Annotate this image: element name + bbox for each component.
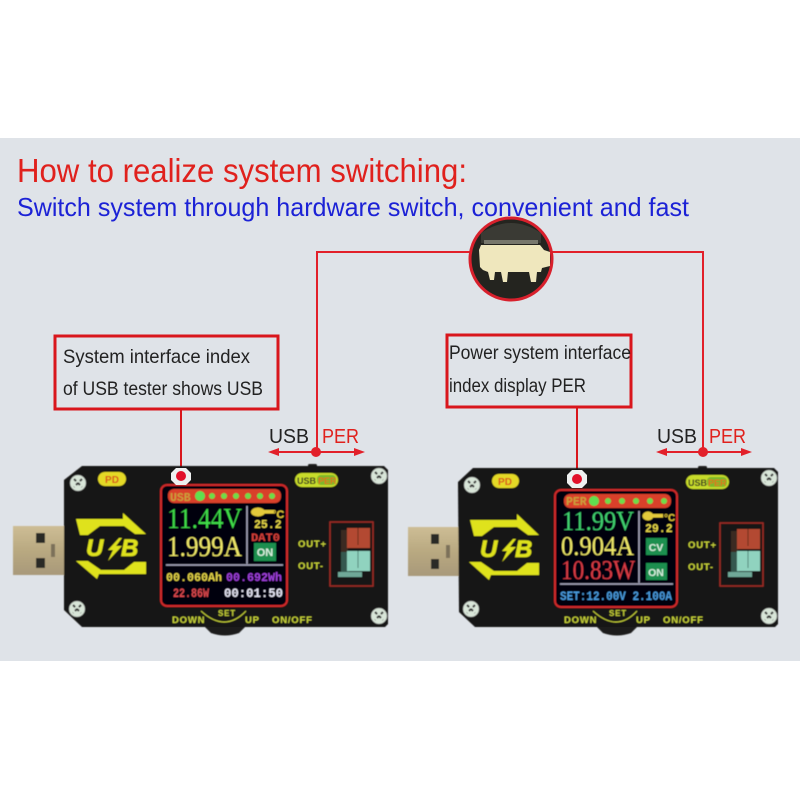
slide switch nub xyxy=(308,464,317,467)
left USB / PER switch indicator xyxy=(268,426,365,457)
USB PER badge xyxy=(295,473,338,487)
PD badge xyxy=(98,472,126,486)
PD badge: PD xyxy=(498,477,512,488)
USB logo xyxy=(76,513,146,579)
callout: power system index xyxy=(447,335,631,407)
screen: PER xyxy=(566,496,587,509)
board xyxy=(64,466,388,627)
button labels xyxy=(564,609,704,626)
screen: ON xyxy=(648,567,664,579)
PD badge xyxy=(492,474,519,488)
USB logo: U xyxy=(86,535,104,562)
marker: left index dot xyxy=(171,468,191,485)
USB PER badge: PER xyxy=(708,478,727,488)
output terminal: OUT+ xyxy=(688,540,717,551)
callout: USB tester index: of USB tester shows USB xyxy=(63,379,263,400)
screen: 11.99V xyxy=(562,506,634,536)
USB logo: U xyxy=(480,536,498,563)
right USB / PER switch indicator: USB xyxy=(657,426,697,448)
screen: 29.2 xyxy=(645,523,673,536)
button labels: DOWN xyxy=(172,615,205,626)
button labels: UP xyxy=(636,615,651,626)
screen: 00.060Ah xyxy=(166,572,222,585)
screen: ON xyxy=(257,547,273,559)
screen: 10.83W xyxy=(561,555,635,585)
screen xyxy=(161,485,287,606)
title: How to realize system switching: xyxy=(17,153,467,190)
USB logo: B xyxy=(121,535,138,562)
USB logo xyxy=(469,514,539,580)
USB PER badge: USB xyxy=(688,478,708,488)
callout: USB tester index xyxy=(55,336,278,409)
callout leader lines xyxy=(181,407,577,472)
screen: °C xyxy=(272,509,284,521)
button labels xyxy=(172,609,313,626)
callout: power system index: Power system interface xyxy=(449,343,631,364)
knob xyxy=(205,627,245,636)
knob xyxy=(597,627,637,636)
icon: hardware slide switch close-up xyxy=(470,218,552,300)
screws xyxy=(463,470,777,624)
marker: right index dot xyxy=(567,470,587,488)
button labels: ON/OFF xyxy=(663,615,704,626)
connector lines from switch to boards xyxy=(317,252,703,450)
button labels: UP xyxy=(245,615,260,626)
screen xyxy=(555,490,677,607)
board xyxy=(458,468,778,627)
button labels: SET xyxy=(609,609,627,618)
right USB / PER switch indicator xyxy=(656,426,752,457)
USB plug xyxy=(408,527,460,576)
screen: SET:12.00V 2.100A xyxy=(560,589,672,604)
output terminal: OUT+ xyxy=(298,539,327,550)
button labels: SET xyxy=(218,609,236,618)
screen: 00.692Wh xyxy=(226,572,282,585)
output terminal: OUT- xyxy=(688,562,714,573)
screen: USB xyxy=(170,492,191,505)
callout: USB tester index: System interface index xyxy=(63,347,250,368)
screen: DAT0 xyxy=(251,533,280,545)
button labels: DOWN xyxy=(564,615,597,626)
screen: 00:01:50 xyxy=(224,587,283,601)
PD badge: PD xyxy=(105,475,119,486)
output terminal: OUT- xyxy=(298,561,324,572)
USB PER badge: PER xyxy=(318,476,337,486)
screws xyxy=(69,468,387,624)
screen: CV xyxy=(649,542,663,554)
left USB / PER switch indicator: PER xyxy=(322,426,359,448)
button labels: ON/OFF xyxy=(272,615,313,626)
background panel xyxy=(0,138,800,661)
device: USB tester xyxy=(13,464,388,636)
screen: 22.86W xyxy=(173,586,209,601)
subtitle: Switch system through hardware switch, convenient and fast xyxy=(17,192,690,222)
screen: °C xyxy=(664,513,675,524)
USB PER badge: USB xyxy=(297,476,317,486)
USB PER badge xyxy=(686,475,729,489)
slide switch nub xyxy=(698,466,707,469)
USB logo: B xyxy=(515,536,532,563)
output terminal xyxy=(688,523,763,586)
screen: 0.904A xyxy=(561,531,634,561)
callout: power system index: index display PER xyxy=(449,376,586,397)
left USB / PER switch indicator: USB xyxy=(269,426,309,448)
right USB / PER switch indicator: PER xyxy=(709,426,746,448)
USB plug xyxy=(13,526,65,575)
screen: 25.2 xyxy=(254,519,282,532)
output terminal xyxy=(298,522,373,586)
screen: 1.999A xyxy=(167,532,243,563)
device: power supply xyxy=(408,466,778,636)
screen: 11.44V xyxy=(167,504,242,535)
